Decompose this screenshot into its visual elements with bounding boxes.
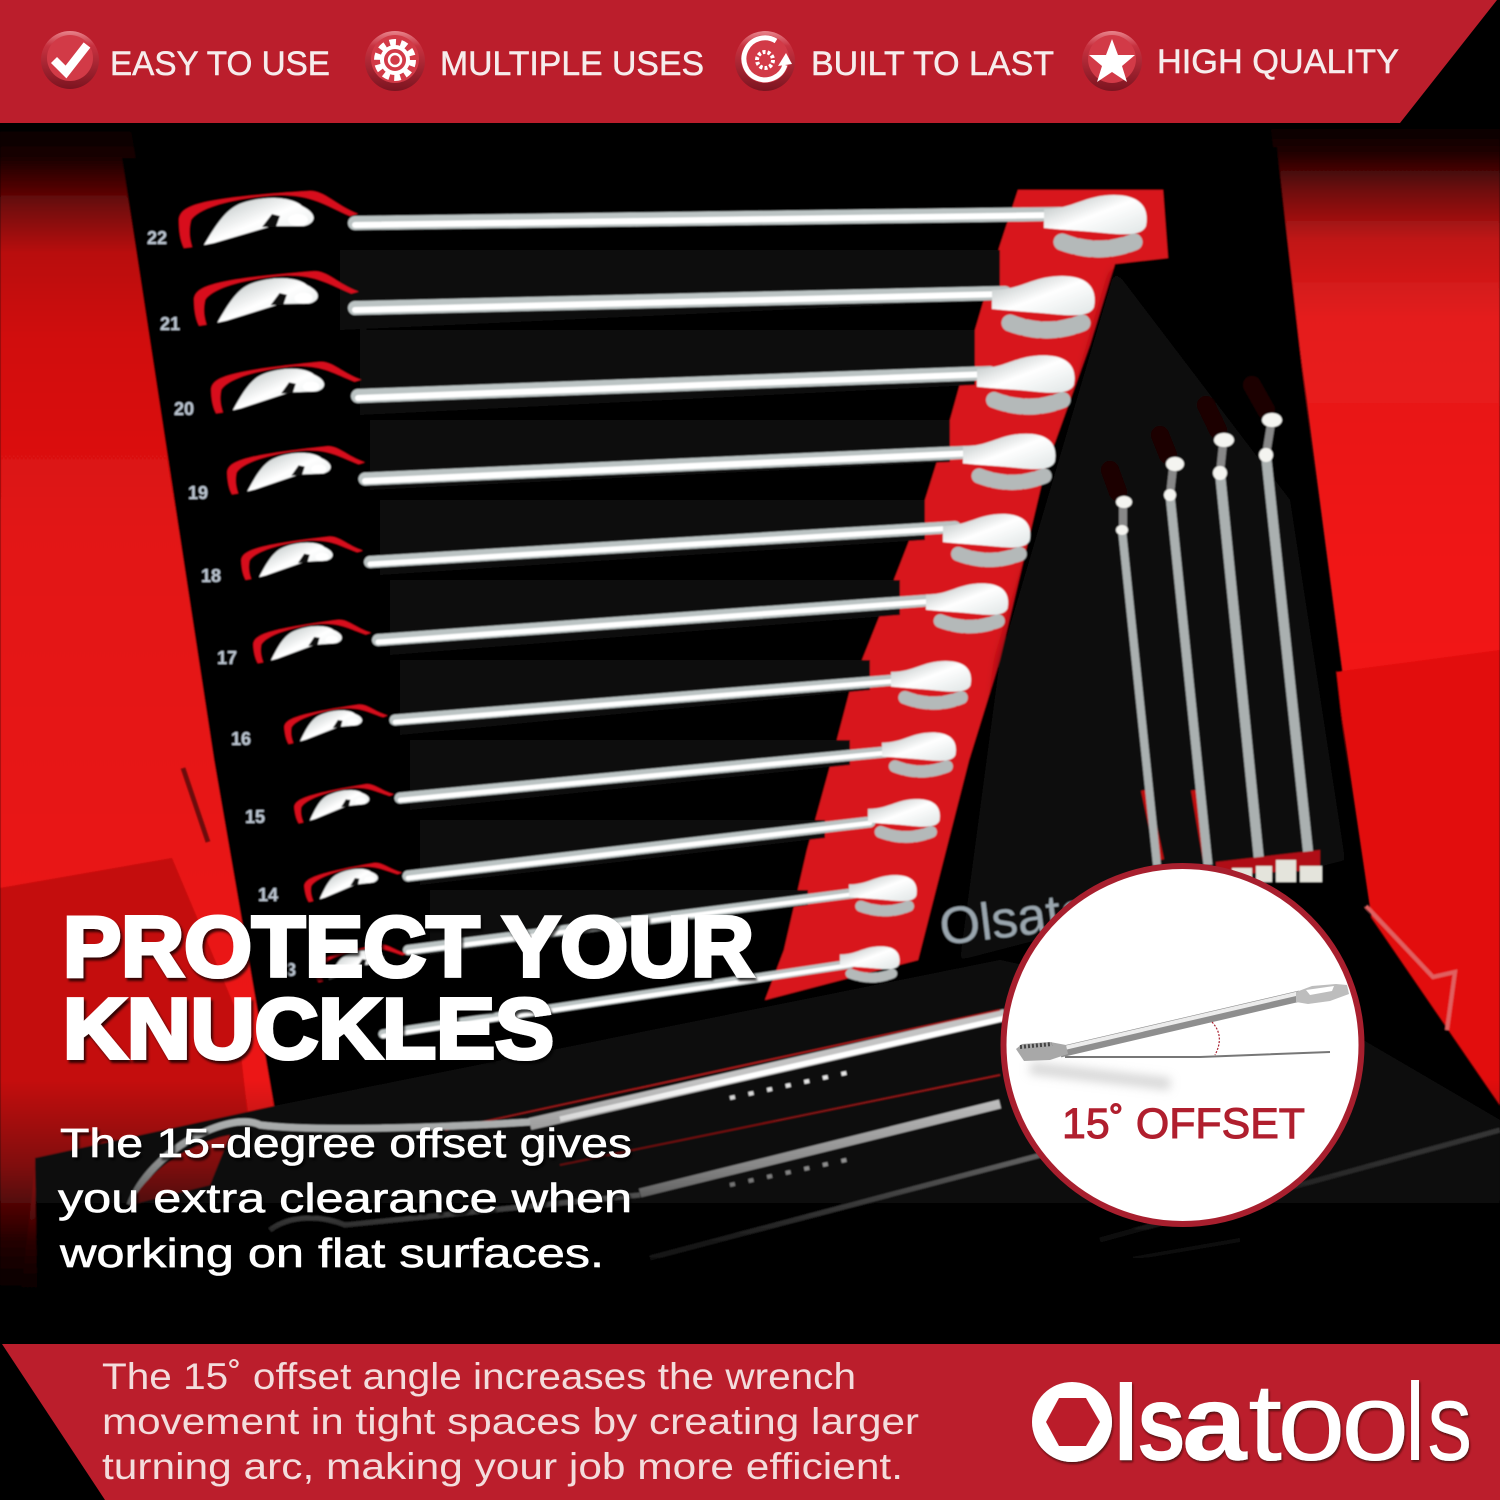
socket size numbers: 14 <box>258 885 278 905</box>
socket size numbers: 17 <box>217 648 237 668</box>
bottom dark fade <box>0 1080 1500 1295</box>
icon: star <box>1082 31 1142 91</box>
wrench 13 <box>313 875 917 983</box>
wrench 15 <box>293 733 956 824</box>
wrench 12 <box>383 946 900 1036</box>
red backdrop left <box>0 123 290 1300</box>
inset wrench <box>1016 984 1349 1084</box>
red backdrop right <box>1270 123 1500 1110</box>
socket size numbers: 3 <box>286 960 296 980</box>
wrench 21 <box>194 270 1095 330</box>
socket size numbers: 20 <box>174 399 194 419</box>
wrench 22 <box>179 191 1147 249</box>
headline <box>63 900 754 1077</box>
icon: gear <box>365 31 425 91</box>
icon: check <box>41 31 99 89</box>
sub-heading text: working on flat surfaces. <box>59 1230 604 1276</box>
sub-heading text: The 15-degree offset gives <box>60 1120 632 1166</box>
description text: movement in tight spaces by creating larger <box>102 1401 919 1442</box>
wrench 19 <box>226 434 1055 495</box>
wrench 17 <box>252 583 1008 663</box>
label: multiple uses: MULTIPLE USES <box>440 45 704 83</box>
description text: The 15˚ offset angle increases the wrench <box>102 1356 856 1397</box>
imprint on tray: brand: Olsato <box>936 881 1093 957</box>
label: easy to use: EASY TO USE <box>110 45 330 83</box>
headline: PROTECT YOUR <box>63 900 754 995</box>
label: 15 offset: 15˚ OFFSET <box>1062 1100 1305 1148</box>
wrench 14 <box>303 799 940 902</box>
top banner <box>0 0 1497 123</box>
socket size numbers: 21 <box>160 314 180 334</box>
callout: 15 degree offset circle <box>1004 866 1362 1224</box>
small wrenches right <box>1110 385 1322 882</box>
sub-heading text <box>58 1120 632 1276</box>
wrench 18 <box>240 514 1030 580</box>
box flap right <box>1366 906 1455 1030</box>
description text <box>102 1356 919 1487</box>
red box corner left <box>0 858 250 1300</box>
label: built to last: BUILT TO LAST <box>811 45 1054 83</box>
socket size numbers: 16 <box>231 729 251 749</box>
offset angle arc <box>1212 1022 1219 1055</box>
icon: built to last cycle <box>735 31 795 91</box>
headline: KNUCKLES <box>63 982 554 1077</box>
red strip behind wrenches <box>765 190 1168 1000</box>
logo: Olsatools <box>1032 1360 1472 1484</box>
red box slit <box>183 768 208 842</box>
label: high quality: HIGH QUALITY <box>1157 43 1399 81</box>
black tray <box>35 147 1500 1345</box>
description text: turning arc, making your job more efficient. <box>102 1446 903 1487</box>
tray felt sheen <box>960 270 1345 960</box>
logo: Olsatools: a <box>1182 1362 1248 1483</box>
fold of tray at bottom <box>35 960 1500 1345</box>
wrench 20 <box>210 355 1075 414</box>
wrenches lying in fold <box>130 1010 1500 1290</box>
socket size numbers <box>147 228 296 980</box>
socket size numbers: 19 <box>188 483 208 503</box>
socket size numbers: 22 <box>147 228 167 248</box>
logo: Olsatools: Ols <box>1037 1363 1186 1483</box>
red shelf right <box>1335 650 1500 1110</box>
logo: Olsatools: too <box>1248 1360 1409 1484</box>
socket size numbers: 15 <box>245 807 265 827</box>
pocket shadows <box>340 250 1000 955</box>
bottom banner <box>2 1344 1500 1500</box>
sub-heading text: you extra clearance when <box>58 1175 632 1221</box>
wrench 16 <box>283 661 971 744</box>
logo: Olsatools: ls <box>1405 1362 1472 1484</box>
socket size numbers: 18 <box>201 566 221 586</box>
